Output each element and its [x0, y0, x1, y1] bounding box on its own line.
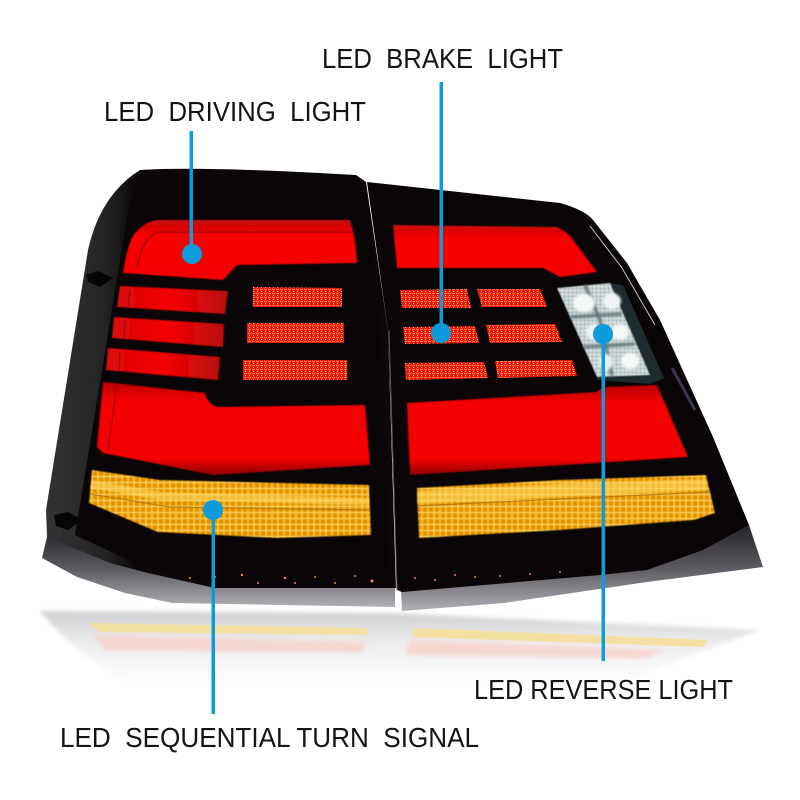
- left amber turn signal: [89, 470, 371, 538]
- label: LED driving light: [104, 96, 366, 264]
- LED driving light upper panel: [123, 220, 357, 280]
- right brake LED rows: [400, 289, 577, 380]
- left brake LED rows: [243, 287, 347, 380]
- label: LED reverse light: [474, 324, 733, 705]
- left tail light housing: [46, 169, 396, 588]
- reflection on floor: [40, 611, 760, 685]
- LED reverse lamp: [557, 283, 650, 377]
- label: LED brake light: LED BRAKE LIGHT: [322, 43, 563, 74]
- driving light bar 1: [117, 286, 228, 314]
- driving light bar 2: [112, 317, 224, 347]
- label: LED sequential turn signal: [60, 500, 479, 753]
- chrome base trim: [42, 525, 763, 611]
- right amber turn signal: [417, 475, 715, 538]
- upper right red panel: [393, 225, 597, 277]
- mounting stud lower: [54, 512, 82, 530]
- small orange indicator dots left: [189, 574, 374, 584]
- lower left red panel: [97, 382, 370, 475]
- lower right red panel: [407, 385, 688, 475]
- mounting stud upper: [86, 271, 113, 287]
- right tail light housing: [367, 182, 749, 592]
- small orange indicator dots right: [414, 571, 561, 581]
- label: LED driving light: LED DRIVING LIGHT: [104, 96, 366, 127]
- label: LED brake light: [322, 43, 563, 343]
- label: LED sequential turn signal: LED SEQUENTIAL TURN SIGNAL: [60, 722, 479, 753]
- reverse light housing: [597, 283, 664, 384]
- driving light bar 3: [106, 348, 220, 380]
- label: LED reverse light: LED REVERSE LIGHT: [474, 674, 733, 705]
